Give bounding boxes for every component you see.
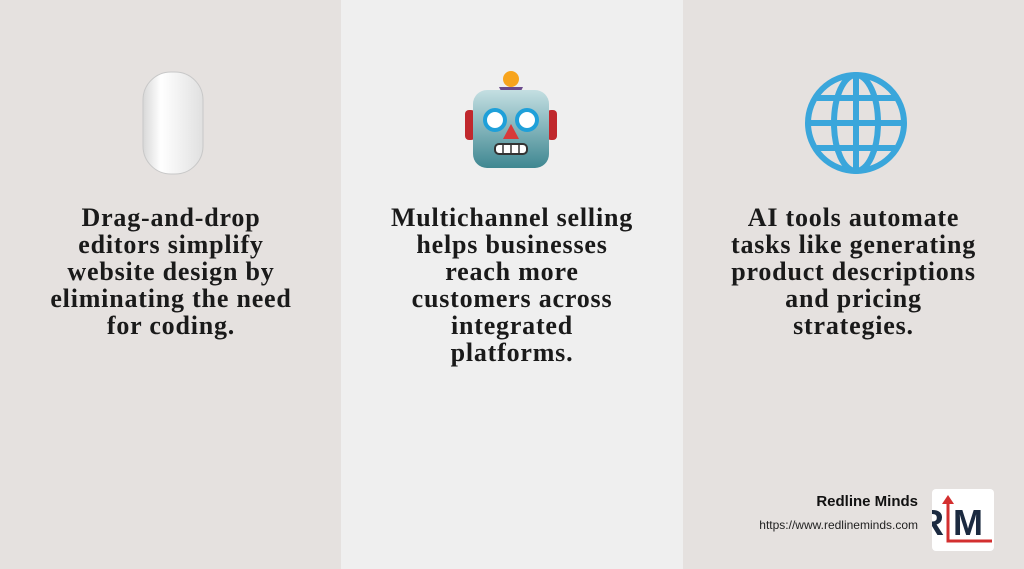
panel: right — [683, 0, 1024, 569]
text: drag-and-drop — [50, 203, 292, 340]
text: multichannel: reach more — [445, 257, 579, 286]
text: multichannel: customers across — [412, 284, 612, 313]
text: AI tools: tasks like generating — [731, 230, 976, 259]
logo — [932, 489, 994, 551]
text: AI tools: strategies. — [793, 311, 914, 340]
text: multichannel: platforms. — [451, 338, 573, 367]
text: multichannel: Multichannel selling — [391, 203, 633, 232]
text: AI tools: and pricing — [785, 284, 922, 313]
text: drag-and-drop: editors simplify — [78, 230, 264, 259]
footer: brand: Redline Minds — [816, 493, 918, 510]
text: AI tools: AI tools automate — [748, 203, 959, 232]
icon: globe — [805, 72, 907, 174]
footer: brand — [759, 493, 918, 532]
logo: M — [953, 502, 983, 543]
footer: brand: https://www.redlineminds.com — [759, 518, 918, 532]
panel: middle — [341, 0, 683, 569]
text: drag-and-drop: website design by — [67, 257, 275, 286]
text: multichannel: helps businesses — [416, 230, 608, 259]
text: drag-and-drop: eliminating the need — [50, 284, 292, 313]
icon: mouse — [142, 72, 204, 174]
text: AI tools: product descriptions — [731, 257, 976, 286]
text: drag-and-drop: Drag-and-drop — [82, 203, 260, 232]
icon: robot — [465, 71, 557, 168]
panel: left — [0, 0, 342, 569]
text: AI tools — [731, 203, 976, 340]
text: multichannel: integrated — [451, 311, 573, 340]
text: drag-and-drop: for coding. — [107, 311, 235, 340]
text: multichannel — [391, 203, 633, 367]
